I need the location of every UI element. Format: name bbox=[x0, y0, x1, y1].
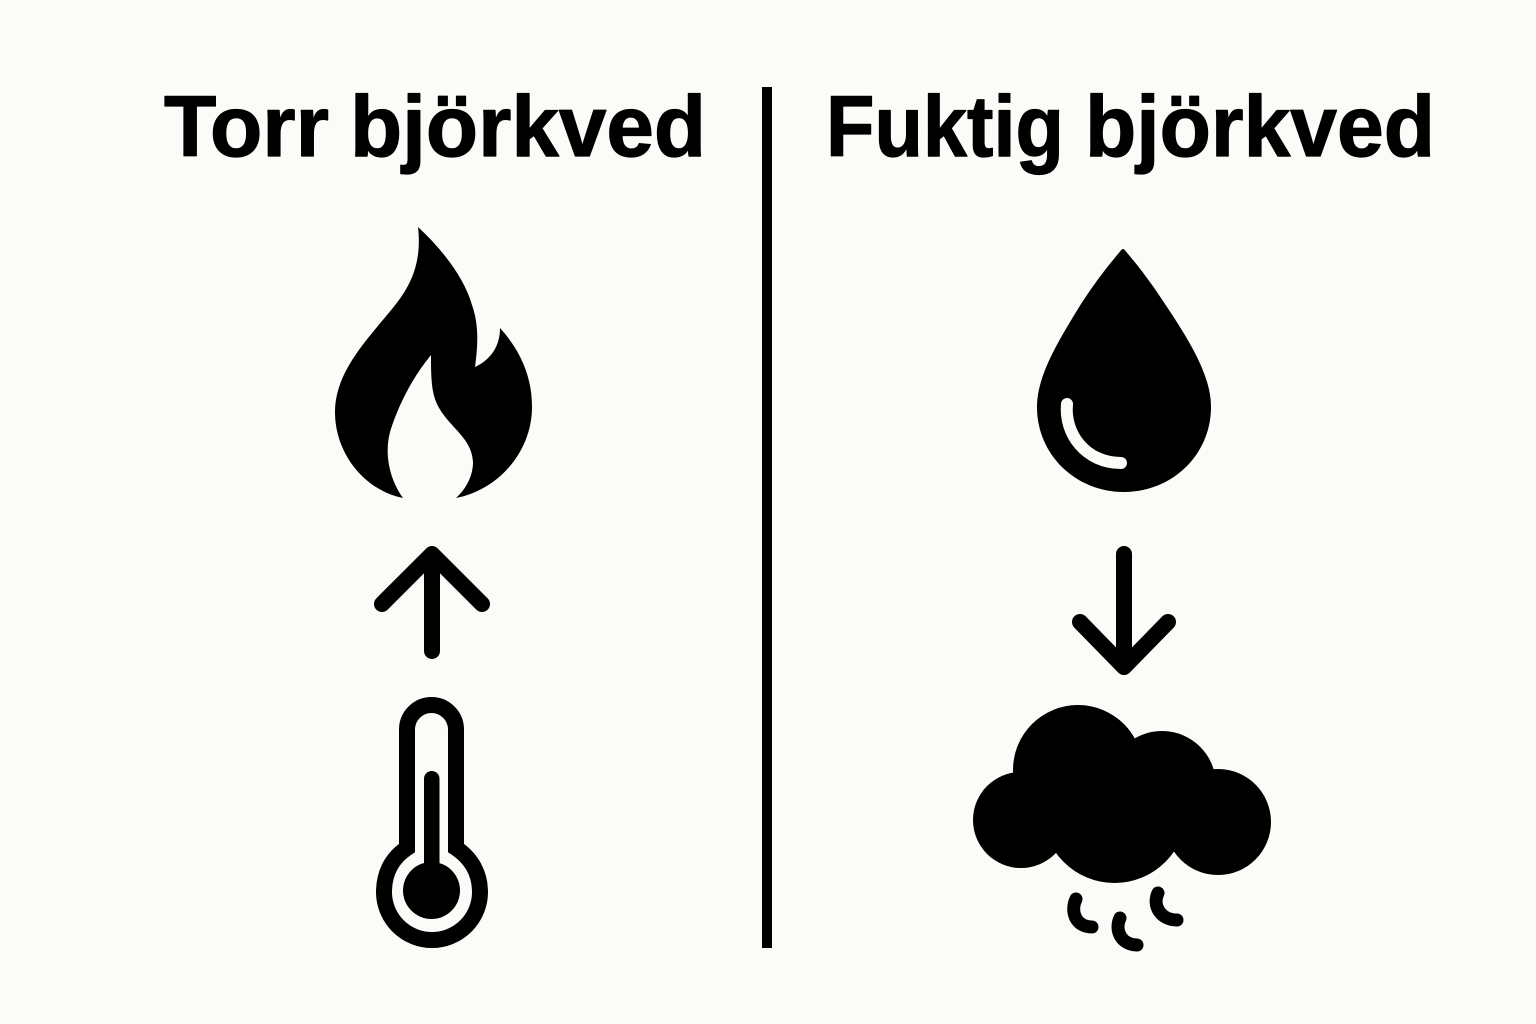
heading: moist birch wood bbox=[826, 79, 1435, 175]
heading: dry birch wood: Torr bbox=[164, 79, 329, 175]
arrow: down bbox=[1080, 554, 1168, 667]
heading: dry birch wood: björkved bbox=[350, 79, 706, 175]
icon: flame bbox=[335, 227, 532, 498]
heading: moist birch wood: Fuktig bbox=[826, 79, 1064, 175]
heading: moist birch wood: björkved bbox=[1085, 79, 1435, 175]
icon: rain cloud bbox=[973, 705, 1271, 945]
arrow: up bbox=[382, 554, 482, 651]
icon: water drop bbox=[1037, 249, 1211, 492]
center divider bbox=[762, 87, 772, 948]
icon: thermometer bbox=[384, 705, 480, 940]
heading: dry birch wood bbox=[164, 79, 706, 175]
